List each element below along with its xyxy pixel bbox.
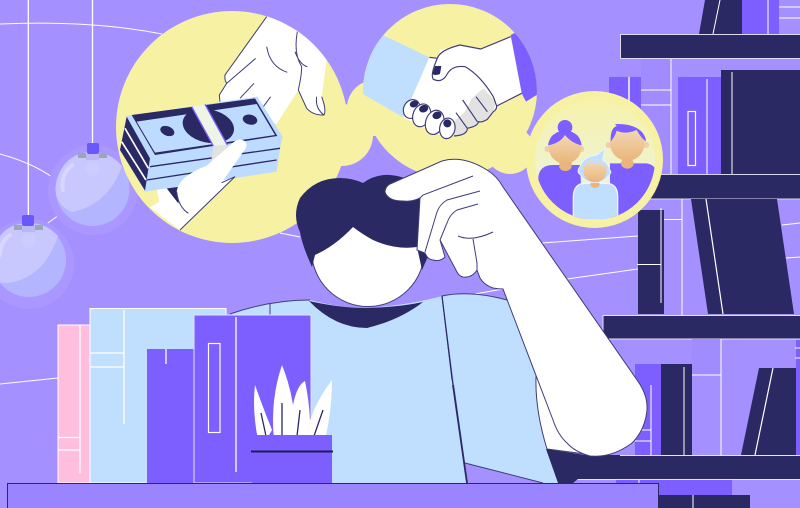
thought: money handover: [120, 7, 333, 230]
books under bottom shelf: [616, 480, 750, 508]
thought: family portrait: [526, 91, 663, 228]
head: [296, 175, 432, 306]
leaves: [254, 365, 332, 440]
left books: [58, 294, 558, 483]
lapel joining shelf: [546, 449, 620, 483]
pot: [252, 435, 332, 483]
father: [606, 124, 655, 227]
fingernails: [410, 100, 452, 128]
fingers: [402, 99, 456, 140]
collar: [309, 301, 423, 328]
pink book: [58, 325, 91, 483]
hanging bulb right: [48, 0, 138, 235]
receiving hand arm: [150, 177, 233, 230]
bookshelf: fourth row books: [635, 339, 800, 455]
child: [573, 148, 618, 220]
purple book tall: [194, 315, 311, 483]
left cuff: [363, 36, 430, 118]
shelf 2: [640, 174, 800, 199]
hair: [296, 175, 432, 270]
giving hand: [218, 16, 327, 124]
clasped hands: [403, 37, 522, 136]
finger lines: [420, 176, 493, 270]
background line: looping curve: [0, 154, 71, 257]
mother: [538, 120, 584, 227]
background lines: horizon strokes: [0, 223, 800, 384]
shelf 4: [575, 456, 800, 480]
blue book: [90, 308, 226, 483]
shelf 3: [603, 316, 800, 339]
elbow back: [536, 377, 600, 454]
bookshelf: top shelf and books: [620, 0, 800, 58]
desk: [8, 484, 658, 508]
purple book short: [147, 349, 194, 483]
receiving thumb: [176, 140, 246, 230]
background line: upper curve: [0, 23, 162, 34]
person body placeholder behind books: [225, 294, 558, 483]
arm and hand: [385, 159, 647, 456]
hanging bulb left: [0, 0, 74, 309]
bookshelf: second row books: [609, 59, 800, 174]
bookshelf: third row books: [637, 199, 794, 315]
thought bubble background: [116, 4, 537, 243]
banknote stack: [120, 97, 283, 192]
right cuff: [510, 33, 537, 102]
plant: [251, 365, 333, 483]
thought: handshake: [363, 33, 537, 140]
